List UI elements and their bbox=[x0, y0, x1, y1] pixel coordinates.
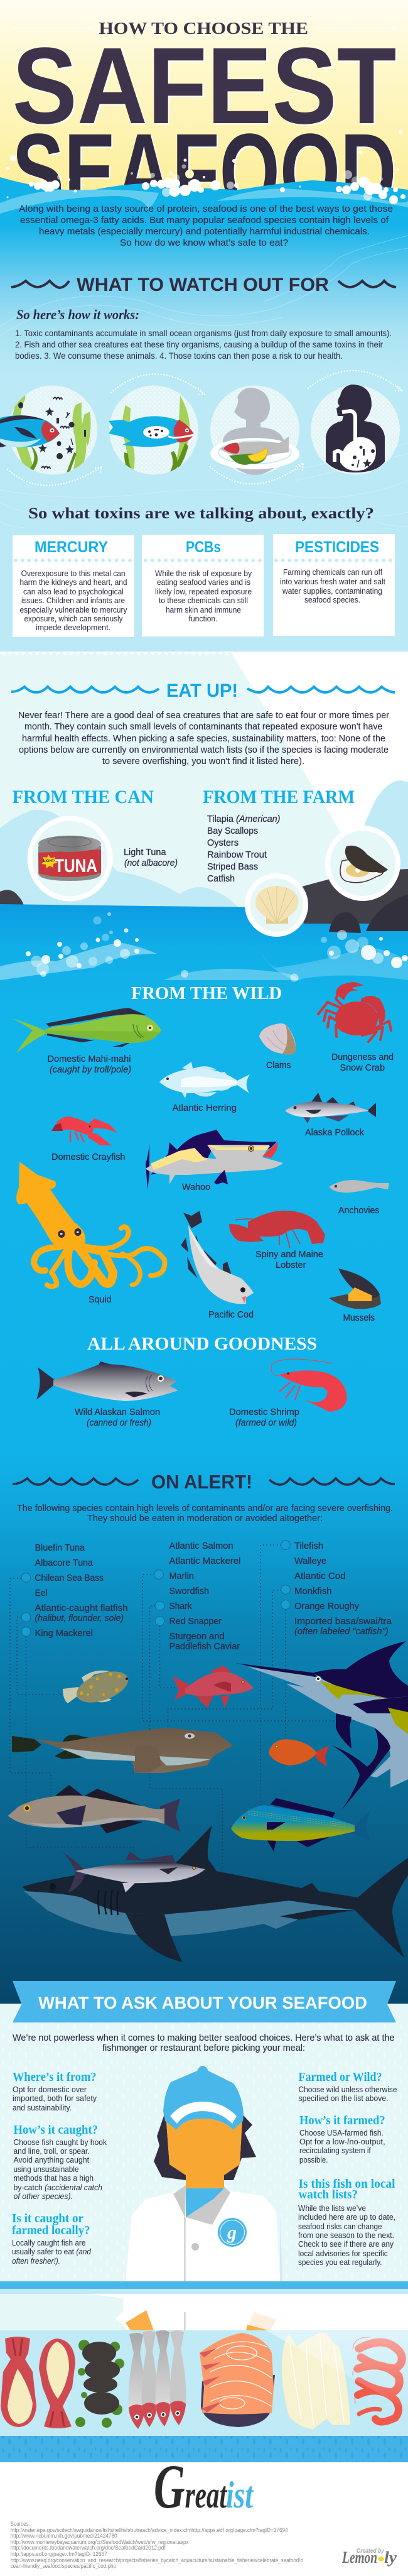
sources list: cean-friendly_seafood/species/pacific_cod.php bbox=[11, 2563, 116, 2569]
question: how's it farmed bbox=[299, 2114, 385, 2164]
eat up paragraph: month. They contain such small levels of contaminants that repeated exposure won't have bbox=[24, 721, 383, 732]
fish: flatfish bbox=[63, 1666, 132, 1708]
heading: on alert bbox=[13, 1471, 395, 1493]
wave highlights bbox=[0, 188, 408, 214]
list: column one: Bluefin Tuna bbox=[35, 1542, 85, 1553]
sources list: Sources: bbox=[11, 2521, 30, 2527]
species: anchovies bbox=[329, 1180, 389, 1192]
fish: bluefin tuna bbox=[62, 1852, 205, 1893]
list: column one: Eel bbox=[35, 1588, 48, 1598]
list: from the farm: Bay Scallops bbox=[207, 826, 258, 836]
label: pacific cod: Pacific Cod bbox=[208, 1309, 254, 1320]
species: mahi-mahi bbox=[12, 1008, 161, 1054]
list: column two: Red Snapper bbox=[169, 1616, 222, 1627]
fish: great white shark bbox=[22, 1825, 408, 1962]
water band bbox=[0, 904, 408, 2004]
tuna circle and can bbox=[28, 816, 113, 901]
ask intro text: We’re not powerless when it comes to making better seafood choices. Here’s what to ask at the bbox=[13, 2033, 394, 2043]
panel: pcbs: to these chemicals can still bbox=[159, 596, 248, 605]
label: crab: Snow Crab bbox=[340, 1062, 385, 1073]
counter bar bbox=[0, 2281, 408, 2294]
label: mussels: Mussels bbox=[343, 1313, 375, 1323]
label: crab: Dungeness and bbox=[331, 1052, 394, 1062]
fish: monkfish bbox=[12, 1728, 233, 1773]
question: how's it farmed: How’s it farmed? bbox=[299, 2114, 385, 2127]
question: how's it caught: by-catch (accidental catch bbox=[14, 2183, 102, 2192]
panel: mercury: harm the kidneys and heart, and bbox=[20, 577, 127, 587]
panel: pcbs: likely low, repeated exposure bbox=[155, 587, 252, 596]
question: is it caught or farmed locally: Locally caught fish are bbox=[12, 2238, 85, 2247]
dotted arrows between steps bbox=[8, 371, 403, 486]
species: pacific cod bbox=[181, 1211, 254, 1304]
species: atlantic herring bbox=[159, 1062, 250, 1098]
panel: pcbs bbox=[142, 535, 264, 636]
heading: all around goodness: ALL AROUND GOODNESS bbox=[87, 1334, 317, 1354]
panel: mercury: Overexposure to this metal can bbox=[21, 569, 126, 578]
list: from the farm: Catfish bbox=[207, 873, 235, 884]
intro paragraph: heavy metals (especially mercury) and potentially harmful industrial chemicals. bbox=[39, 226, 370, 237]
question: how's it caught: How’s it caught? bbox=[14, 2123, 98, 2137]
ask intro text bbox=[13, 2033, 394, 2053]
intro paragraph: So how do we know what’s safe to eat? bbox=[120, 237, 288, 248]
list: from the farm: Oysters bbox=[207, 838, 239, 848]
list: from the farm: Striped Bass bbox=[207, 861, 258, 872]
label: lobster bbox=[255, 1249, 323, 1270]
eat up paragraph bbox=[18, 710, 389, 767]
step 2: fish with organisms in stomach bbox=[109, 386, 198, 476]
background: sunny sky bbox=[0, 0, 408, 195]
question: how's it farmed: recirculating system if bbox=[299, 2146, 371, 2155]
species: wahoo bbox=[146, 1130, 283, 1189]
label: domestic shrimp: (farmed or wild) bbox=[235, 1417, 297, 1428]
tuna circle and can: TUNA bbox=[55, 856, 97, 876]
heading: eat up bbox=[11, 680, 395, 701]
list: column one: (halibut, flounder, sole) bbox=[35, 1613, 124, 1624]
species: mussels bbox=[329, 1269, 381, 1309]
question: how's it caught: Avoid anything caught bbox=[14, 2155, 89, 2164]
oyster circle bbox=[325, 826, 400, 901]
display: four whole fish bbox=[129, 2330, 186, 2429]
heading: eat up: EAT UP! bbox=[166, 680, 238, 701]
label: lobster: Spiny and Maine bbox=[255, 1249, 323, 1260]
list: column two bbox=[154, 1541, 241, 1652]
step 4: human digestive system bbox=[311, 385, 400, 475]
steps text bbox=[15, 328, 392, 361]
step 3: person and fish plate bbox=[210, 386, 299, 475]
heading: on alert: ON ALERT! bbox=[151, 1471, 252, 1493]
question: is it caught or farmed locally: farmed locally? bbox=[12, 2224, 90, 2237]
mountains and rocks scenery bbox=[0, 780, 408, 930]
question: where's it from: Opt for domestic over bbox=[13, 2085, 87, 2094]
list: column three: Tilefish bbox=[294, 1541, 323, 1551]
question: where's it from: and sustainability. bbox=[13, 2103, 72, 2112]
label: wild alaskan salmon: (canned or fresh) bbox=[87, 1417, 151, 1428]
dotted connector lines bbox=[10, 1545, 375, 1880]
display: white fillets bbox=[282, 2333, 350, 2430]
species: wild alaskan salmon bbox=[36, 1362, 178, 1401]
background: white footer bbox=[0, 2462, 408, 2576]
label: light tuna: Light Tuna bbox=[124, 847, 166, 858]
panel: pesticides: Farming chemicals can run off bbox=[283, 567, 382, 577]
question: is this fish on local watch lists: local advisories for specific bbox=[298, 2249, 388, 2258]
headings: from the can and farm: FROM THE FARM bbox=[203, 787, 355, 807]
question: is it caught or farmed locally: Is it caught or bbox=[12, 2212, 83, 2225]
label: wild alaskan salmon: Wild Alaskan Salmon bbox=[75, 1407, 160, 1417]
label: mahi-mahi bbox=[48, 1054, 131, 1075]
panel: mercury: impede development. bbox=[36, 623, 110, 632]
list: from the farm bbox=[207, 814, 280, 884]
list: column three: Walleye bbox=[294, 1556, 326, 1566]
panel: pesticides: seafood species. bbox=[304, 595, 360, 604]
fishmonger figure bbox=[126, 2066, 282, 2281]
question: where's it from bbox=[13, 2070, 97, 2112]
list: column two: Sturgeon and bbox=[169, 1631, 225, 1642]
label: alaska pollock: Alaska Pollock bbox=[305, 1127, 364, 1138]
headings: from the can and farm bbox=[13, 787, 355, 807]
list: from the farm: Rainbow Trout bbox=[207, 849, 267, 860]
panel: mercury bbox=[13, 535, 134, 637]
species: clam bbox=[259, 1023, 296, 1055]
question: is this fish on local watch lists: Is this fish on local bbox=[299, 2177, 395, 2191]
panel: pcbs: eating seafood varies and is bbox=[157, 577, 250, 587]
question: is this fish on local watch lists: Check to see if there are any bbox=[298, 2239, 394, 2249]
background: pale ask section bbox=[0, 2004, 408, 2281]
banner: what to ask about your seafood: WHAT TO ASK ABOUT YOUR SEAFOOD bbox=[38, 1993, 367, 2012]
list: column three: (often labeled "catfish") bbox=[294, 1626, 389, 1637]
step 1: fish eating organisms bbox=[0, 386, 97, 478]
label: wahoo: Wahoo bbox=[182, 1182, 210, 1192]
headings: from the can and farm: FROM THE CAN bbox=[13, 787, 154, 807]
question: how's it caught: methods that has a high bbox=[14, 2173, 94, 2183]
question: is this fish on local watch lists: watch lists? bbox=[299, 2188, 358, 2202]
list: column two: Swordfish bbox=[169, 1586, 209, 1596]
question: is it caught or farmed locally: usually safer to eat (and bbox=[12, 2247, 92, 2256]
list: column one: Albacore Tuna bbox=[35, 1558, 94, 1568]
sources list: http://documents.foodandwaterwatch.org/doc/SeafoodCard2012.pdf bbox=[11, 2545, 166, 2551]
display: shrimp pile bbox=[353, 2337, 402, 2422]
list: column three bbox=[281, 1541, 392, 1637]
logo: greatist: Great bbox=[154, 2452, 228, 2521]
question: how's it farmed: possible. bbox=[299, 2155, 328, 2164]
eat up paragraph: harmful health effects. When picking a safe species, sustainability matters, too: None of the bbox=[22, 733, 385, 744]
display: oysters on greens bbox=[75, 2340, 124, 2428]
panel: mercury: can also lead to psychological bbox=[23, 587, 124, 596]
question: is this fish on local watch lists: included here are up to date, bbox=[298, 2212, 395, 2222]
sources list: http://water.epa.gov/scitech/swguidance/fishshellfish/outreach/advice_index.cfmhttp://apps.edf.org/page.cfm?tagID=17694 bbox=[11, 2527, 288, 2533]
fish: marlin bbox=[235, 1641, 408, 1809]
fish: walleye tilefish blue yellow bbox=[231, 1798, 371, 1852]
fishmonger figure: g bbox=[227, 2222, 237, 2243]
water waves and bubbles bbox=[0, 912, 408, 981]
label: domestic shrimp bbox=[229, 1407, 299, 1428]
sources list: http://apps.edf.org/page.cfm?tagID=12667 bbox=[11, 2551, 107, 2557]
species: crab bbox=[318, 982, 391, 1042]
question: where's it from: imported, both for safety bbox=[13, 2093, 97, 2103]
species: crayfish bbox=[51, 1116, 117, 1145]
panel: pesticides: PESTICIDES bbox=[295, 538, 379, 556]
panel: mercury: exposure, which can seriously bbox=[24, 614, 123, 623]
list: column three: Monkfish bbox=[294, 1586, 332, 1596]
question: farmed or wild: Choose wild unless otherwise bbox=[299, 2085, 397, 2094]
species: lobster bbox=[229, 1211, 325, 1248]
heading: what to watch out for bbox=[11, 275, 396, 295]
sources list bbox=[11, 2521, 303, 2569]
question: is it caught or farmed locally: often fresher!). bbox=[12, 2256, 60, 2266]
label: squid: Squid bbox=[89, 1294, 112, 1305]
sources list: http://www.montereybayaquarium.org/cr/SeafoodWatch/web/sfw_regional.aspx bbox=[11, 2539, 189, 2545]
eat up paragraph: to severe overfishing, you won't find it listed here). bbox=[102, 756, 304, 767]
foreground rocks bbox=[329, 894, 408, 933]
list: column three: Imported basa/swai/tra bbox=[294, 1616, 392, 1627]
panel: mercury: issues. Children and infants are bbox=[21, 596, 125, 605]
logo: created by lemonly: Created by bbox=[357, 2548, 384, 2555]
panel: pesticides bbox=[273, 534, 395, 636]
display: salmon steaks bbox=[200, 2333, 275, 2427]
list: column one: Chilean Sea Bass bbox=[35, 1573, 104, 1583]
heading: from the wild: FROM THE WILD bbox=[131, 983, 282, 1003]
list: column two: Atlantic Mackerel bbox=[169, 1556, 241, 1566]
counter glass with reflected fishmonger bbox=[0, 2294, 408, 2330]
steps text: 2. Fish and other sea creatures eat these tiny organisms, causing a buildup of the same toxins in their bbox=[15, 339, 383, 349]
label: clams: Clams bbox=[266, 1060, 291, 1071]
list: column three: Orange Roughy bbox=[294, 1601, 359, 1612]
list: column one: Atlantic-caught flatfish bbox=[35, 1603, 128, 1613]
banner: what to ask about your seafood bbox=[13, 1981, 396, 2022]
question: farmed or wild: specified on the list above. bbox=[299, 2093, 388, 2103]
species: domestic shrimp bbox=[271, 1359, 347, 1412]
question: how's it caught: using unsustainable bbox=[14, 2164, 79, 2174]
panel: pesticides: into various fresh water and salt bbox=[280, 577, 385, 586]
question: is this fish on local watch lists: While the lists we’ve bbox=[298, 2203, 366, 2213]
subheading: so here's how it works: So here’s how it works: bbox=[16, 307, 139, 322]
list: column one bbox=[21, 1542, 128, 1639]
label: light tuna: (not albacore) bbox=[124, 858, 178, 868]
label: crab bbox=[331, 1052, 394, 1073]
fish: orange roughy bbox=[269, 1739, 329, 1767]
on alert paragraph: They should be eaten in moderation or avoided altogether: bbox=[87, 1513, 323, 1524]
intro paragraph: essential omega-3 fatty acids. But many popular seafood species contain high levels of bbox=[20, 215, 389, 226]
panel: pcbs: While the risk of exposure by bbox=[155, 569, 252, 578]
panel: pcbs: function. bbox=[188, 614, 217, 623]
list: column one: King Mackerel bbox=[35, 1628, 93, 1639]
list: column two: Marlin bbox=[169, 1571, 194, 1581]
list: column two: Atlantic Salmon bbox=[169, 1541, 234, 1551]
on alert paragraph bbox=[17, 1503, 393, 1524]
fish: red snapper bbox=[173, 1666, 254, 1708]
fish: sea bass bbox=[8, 1785, 180, 1833]
label: mahi-mahi: (caught by troll/pole) bbox=[50, 1064, 131, 1075]
panel: pcbs: harm skin and immune bbox=[166, 605, 241, 614]
foam and bubbles over the wave bbox=[6, 130, 405, 204]
question: farmed or wild bbox=[299, 2070, 397, 2103]
seafood display case bbox=[0, 2330, 408, 2436]
question: is this fish on local watch lists: seafood risks can change bbox=[298, 2222, 382, 2231]
question: where's it from: Where’s it from? bbox=[13, 2070, 97, 2084]
logo: greatist: ist bbox=[226, 2474, 254, 2516]
panel: pesticides: water supplies, contaminating bbox=[282, 586, 382, 596]
scallop shell circle bbox=[245, 873, 308, 937]
steps text: bodies. 3. We consume these animals. 4. Those toxins can then pose a risk to our health. bbox=[15, 351, 343, 361]
list: column three: Atlantic Cod bbox=[294, 1571, 346, 1581]
species: squid bbox=[16, 1162, 164, 1287]
sources list: http://www.ncbi.nlm.nih.gov/pubmed/21424780 bbox=[11, 2533, 117, 2539]
on alert paragraph: The following species contain high levels of contaminants and/or are facing severe overfishing. bbox=[17, 1503, 393, 1514]
question: how's it caught: and line, troll, or spear. bbox=[14, 2146, 89, 2156]
logo: created by lemonly: ly bbox=[384, 2548, 397, 2567]
label: wild alaskan salmon bbox=[75, 1407, 160, 1428]
heading: so what toxins: So what toxins are we talking about, exactly? bbox=[28, 505, 374, 522]
background: ocean upper section bbox=[0, 177, 408, 652]
list: from the farm: Tilapia (American) bbox=[207, 814, 280, 824]
list: column two: Paddlefish Caviar bbox=[169, 1641, 240, 1652]
label: crayfish: Domestic Crayfish bbox=[51, 1152, 126, 1162]
label: mahi-mahi: Domestic Mahi-mahi bbox=[48, 1054, 131, 1064]
question: how's it caught: Choose fish caught by hook bbox=[14, 2137, 107, 2147]
panel: pcbs: PCBs bbox=[186, 538, 221, 556]
display: lobster tails bbox=[1, 2337, 75, 2428]
species: alaska pollock bbox=[285, 1093, 376, 1123]
question: is this fish on local watch lists bbox=[298, 2177, 395, 2267]
intro paragraph: Along with being a tasty source of protein, seafood is one of the best ways to get those bbox=[19, 204, 393, 214]
eat up paragraph: options below are currently on environmental watch lists (so if the species is facing moderate bbox=[19, 745, 389, 755]
title kicker: how to choose the: HOW TO CHOOSE THE bbox=[99, 19, 308, 38]
heading: what to watch out for: WHAT TO WATCH OUT FOR bbox=[77, 275, 329, 295]
label: lobster: Lobster bbox=[276, 1260, 306, 1270]
question: how's it farmed: Opt for a low-/no-output, bbox=[299, 2137, 385, 2146]
label: domestic shrimp: Domestic Shrimp bbox=[229, 1407, 299, 1417]
tuna circle and can: LIGHT bbox=[43, 860, 54, 863]
question: farmed or wild: Farmed or Wild? bbox=[299, 2070, 382, 2084]
label: light tuna bbox=[124, 847, 178, 868]
question: is this fish on local watch lists: species you eat regularly. bbox=[298, 2257, 382, 2267]
list: column two: Shark bbox=[169, 1601, 192, 1612]
intro paragraph bbox=[19, 204, 393, 248]
background: pale eat up section bbox=[0, 652, 408, 942]
ask intro text: fishmonger or restaurant before picking your meal: bbox=[102, 2043, 305, 2053]
question: how's it caught bbox=[14, 2123, 107, 2201]
eat up paragraph: Never fear! There are a good deal of sea creatures that are safe to eat four or more times per bbox=[18, 710, 389, 721]
display glass glare bbox=[266, 2330, 408, 2410]
question: is it caught or farmed locally bbox=[12, 2212, 92, 2266]
panel: mercury: MERCURY bbox=[35, 538, 108, 556]
label: anchovies: Anchovies bbox=[338, 1205, 379, 1216]
logo: created by lemonly: Lemon bbox=[341, 2548, 377, 2567]
label: atlantic herring: Atlantic Herring bbox=[172, 1103, 237, 1113]
question: how's it farmed: Choose USA-farmed fish. bbox=[299, 2128, 384, 2137]
panel: mercury: especially vulnerable to mercury bbox=[20, 605, 127, 614]
question: how's it caught: of other species). bbox=[14, 2191, 73, 2201]
textured blue band bbox=[0, 2436, 408, 2462]
question: is this fish on local watch lists: from one season to the next. bbox=[298, 2230, 394, 2240]
sources list: http://www.neaq.org/conservation_and_research/projects/fisheries_bycatch_aquaculture/sustainable_fisheries/celebrate_seafood/o bbox=[11, 2557, 303, 2563]
